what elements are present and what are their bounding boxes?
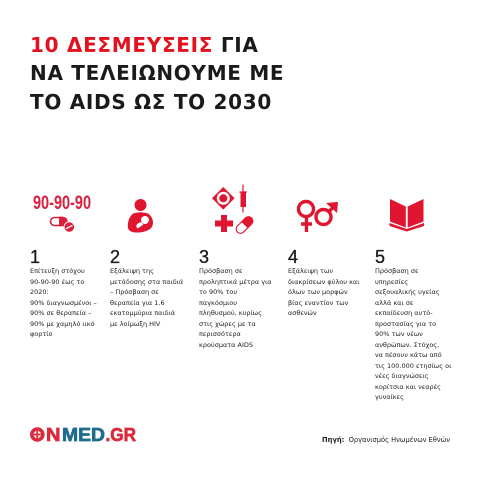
text 2: εκατομμύρια παιδιά [110,309,175,317]
text 4: διακρίσεων φύλου και [288,278,359,286]
text 5: τις 100.000 ετησίως οι [375,362,451,370]
text 5 [375,267,452,401]
text 1: 90% διαγνωσμένοι – [30,298,97,306]
text 5: Πρόσβαση σε [375,267,418,275]
text 1: 2020: [30,288,49,296]
text 4: βίας εναντίον των [288,298,348,306]
icon: open book [390,199,424,232]
text 4: όλων των μορφών [288,288,348,296]
column 1 [30,247,97,338]
text 5: να πέσουν κάτω από [375,351,442,359]
number 4: 4 [288,247,298,267]
text 5: νέες διαγνώσεις [375,372,429,380]
text 3: κρούσματα AIDS [199,340,253,348]
text 2: θεραπεία για 1.6 [110,298,165,306]
text 3: περισσότερα [199,330,241,338]
icon: mother and child [128,199,153,233]
number 5: 5 [375,247,385,267]
text 5: 90% των νέων [375,330,423,338]
text 3: στις χώρες με τα [199,320,256,328]
text 1: 90% με χαμηλό ιικό [30,320,95,328]
logo: MED [62,424,105,445]
text 3: Πρόσβαση σε [199,267,242,275]
text 2: μετάδοσης στα παιδιά [110,278,183,286]
text 1 [30,267,97,338]
text 4: ασθενών [288,309,317,317]
text 2: με λοίμωξη HIV [110,320,160,328]
text 4: Εξάλειψη των [288,267,333,275]
text 5: σεξουαλικής υγείας [375,288,440,296]
text 5: ανθρώπων. Στόχος, [375,340,439,348]
text 1: φορτίο [30,330,52,338]
text 3: πληθυσμού, κυρίως [199,309,262,317]
text 1: Επίτευξη στόχου [30,267,85,275]
number 1: 1 [30,247,40,267]
text 3 [199,267,272,348]
text 1: 90-90-90 έως το [30,278,84,286]
text 5: αλλά και σε [375,298,413,306]
title [30,32,284,114]
logo: .GR [106,424,136,445]
text 5: υπηρεσίες [375,278,408,286]
text 5: κορίτσια και νεαρές [375,382,441,390]
title: ΝΑ ΤΕΛΕΙΩΝΟΥΜΕ ΜΕ [30,61,284,85]
text 3: παγκόσμιου [199,298,237,306]
text 5: προστασίας για το [375,320,436,328]
text 4 [288,267,360,317]
icon: prevention measures [212,184,255,235]
icon: 90-90-90 pill: 90-90-90 [33,192,91,214]
text 2: Εξάλειψη της [110,267,154,275]
icon: gender symbols [298,202,338,232]
text 5: γυναίκες [375,393,404,401]
column 3 [199,247,272,348]
title: 10 ΔΕΣΜΕΥΣΕΙΣ ΓΙΑ [30,32,259,56]
column 4 [288,247,360,317]
title: ΤΟ AIDS ΩΣ ΤΟ 2030 [30,90,272,114]
column 2 [110,247,183,328]
source: Πηγή: Οργανισμός Ηνωμένων Εθνών [322,436,450,444]
text 2 [110,267,183,328]
text 2: – Πρόσβαση σε [110,288,159,296]
number 2: 2 [110,247,120,267]
text 5: εκπαίδευση αυτό- [375,309,433,317]
column 5 [375,247,452,401]
number 3: 3 [199,247,209,267]
logo: N [46,424,60,445]
text 3: προληπτικά μέτρα για [199,278,272,286]
icon: 90-90-90 pill [33,192,91,232]
text 1: 90% σε θεραπεία – [30,309,91,317]
text 3: το 90% του [199,288,237,296]
